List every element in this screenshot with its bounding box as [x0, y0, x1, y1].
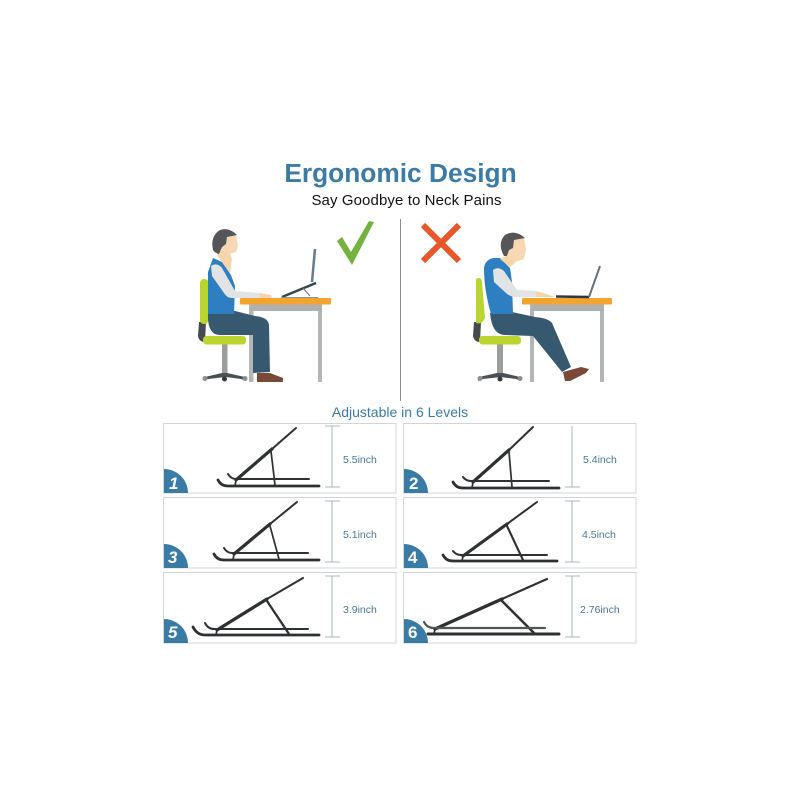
panel: level 2: [404, 424, 636, 493]
height marker 4.5inch: [565, 501, 616, 562]
height marker 5.5inch: 5.5inch: [343, 454, 377, 466]
panel: level 6: [404, 572, 636, 643]
illustration: poor posture without stand: [473, 233, 612, 382]
height marker 2.76inch: 2.76inch: [580, 604, 620, 616]
height marker 3.9inch: [325, 576, 377, 637]
center divider: [400, 219, 402, 401]
icon: green check: [337, 221, 374, 265]
height marker 5.4inch: 5.4inch: [583, 454, 617, 466]
stand at level 5: [193, 578, 319, 635]
badge 2: 2: [409, 474, 418, 493]
badge 6: [404, 619, 428, 643]
laptop on stand: [281, 249, 318, 298]
stand at level 6: [424, 579, 559, 634]
height marker 5.1inch: [325, 501, 377, 562]
badge 6: 6: [408, 623, 417, 642]
desk: [240, 298, 331, 382]
badge 1: 1: [169, 474, 178, 493]
heading: adjustable levels: Adjustable in 6 Levels: [332, 404, 468, 420]
stand at level 3: [214, 502, 319, 560]
height marker 4.5inch: 4.5inch: [582, 529, 616, 541]
badge 1: [164, 469, 188, 493]
badge 5: [164, 619, 188, 643]
panel: level 3: [164, 498, 396, 568]
badge 5: 5: [168, 623, 178, 642]
panel: level 4: [404, 498, 636, 568]
height marker 5.1inch: 5.1inch: [343, 529, 377, 541]
stand at level 1: [218, 428, 319, 486]
height marker 5.5inch: [325, 426, 377, 487]
height marker 3.9inch: 3.9inch: [343, 604, 377, 616]
chair: [198, 279, 248, 382]
height marker 5.4inch: [565, 426, 617, 487]
badge 2: [404, 469, 428, 493]
badge 4: 4: [408, 548, 418, 567]
height marker 2.76inch: [565, 576, 620, 637]
illustration: correct posture with laptop stand: [198, 229, 331, 382]
title: Ergonomic Design: [284, 158, 517, 188]
badge 3: 3: [168, 548, 178, 567]
panel: level 5: [164, 572, 396, 643]
person: [208, 229, 283, 382]
desk: [522, 298, 612, 382]
subtitle: Say Goodbye to Neck Pains: [311, 192, 502, 209]
chair: [473, 278, 522, 382]
badge 3: [164, 544, 188, 568]
person: [484, 233, 589, 381]
stand at level 2: [453, 427, 559, 488]
stand at level 4: [443, 502, 557, 561]
laptop flat on desk: [556, 266, 600, 297]
panel: level 1: [164, 424, 396, 493]
badge 4: [404, 544, 428, 568]
icon: red cross: [423, 225, 459, 261]
